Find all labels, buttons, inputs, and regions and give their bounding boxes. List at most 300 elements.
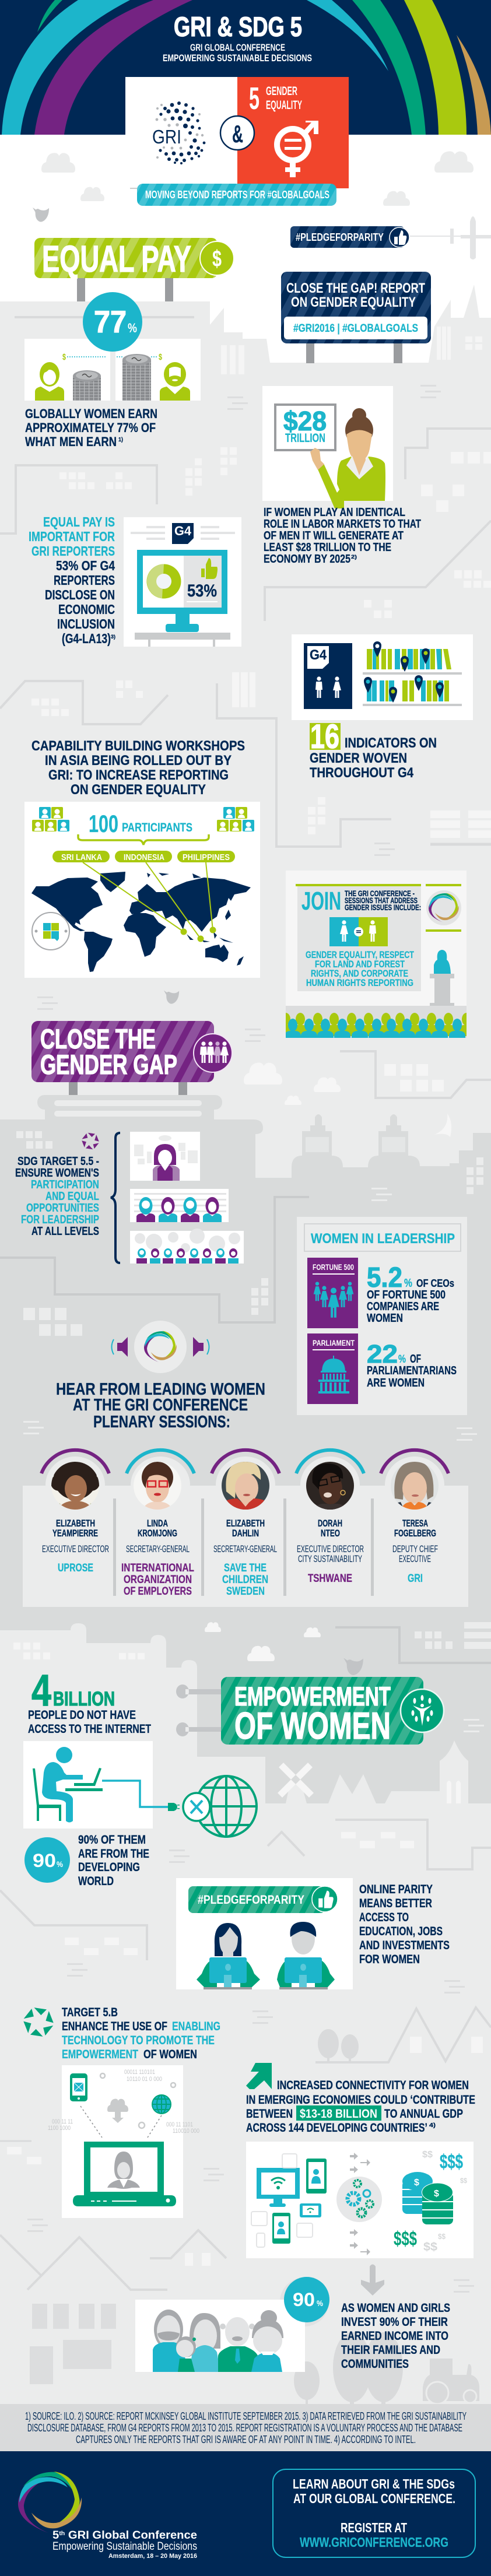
background street lines on dark layer [0, 1197, 491, 1663]
woman [190, 2313, 220, 2372]
text: equal pay for reporters [29, 514, 115, 646]
speaker organisations: ORGANIZATION [124, 1574, 192, 1586]
seated person [42, 1747, 83, 1823]
fortune 500 stat: COMPANIES ARE [367, 1300, 439, 1313]
speaker organisations: SWEDEN [226, 1585, 265, 1598]
background windows [7, 327, 491, 2266]
speaker organisations: CHILDREN [222, 1574, 268, 1586]
map pins [364, 641, 444, 703]
woman icon [35, 362, 64, 401]
text: if women play: ECONOMY BY 2025 [264, 553, 350, 566]
speaker roles: CITY SUSTAINABILITY [298, 1553, 362, 1564]
text: globally women earn: WHAT MEN EARN [25, 434, 117, 449]
sign: close the gap: #GRI2016 | #GLOBALGOALS [293, 322, 418, 335]
heading: capability building: GRI: TO INCREASE REPORTING [48, 767, 229, 783]
text: increased connectivity: ACROSS 144 DEVELOPING COUNTRIES’ [246, 2121, 427, 2135]
speaker organisations [58, 1562, 423, 1598]
dollar signs: $$ [438, 2232, 446, 2241]
text: equal pay for reporters: 53% OF G4 [56, 558, 115, 573]
building strip [15, 316, 194, 318]
text: online parity: FOR WOMEN [359, 1953, 420, 1966]
dollar signs: $$ [422, 2150, 433, 2160]
speaker names: ELIZABETH [226, 1518, 265, 1529]
binary digits: 110010 000 [173, 2128, 199, 2135]
equality tile [329, 917, 388, 946]
speaker organisations: SAVE THE [224, 1562, 266, 1574]
panel: pledge for parity [176, 1878, 353, 1989]
speaker names: YEAMPIERRE [52, 1528, 98, 1539]
stat: 4 billion: PEOPLE DO NOT HAVE [28, 1708, 136, 1722]
binary digits: 000 11 1101 [166, 2121, 193, 2128]
stat: 77 percent: 77 [94, 305, 127, 339]
parliament stat: ARE WOMEN [367, 1377, 425, 1389]
clouds [41, 151, 474, 206]
laptop [73, 2142, 176, 2206]
header band [0, 0, 491, 135]
conference logo [18, 2472, 197, 2560]
speaker organisations: TSHWANE [308, 1573, 352, 1585]
heading: hear from leading women: HEAR FROM LEADING WOMEN [56, 1380, 265, 1399]
JOIN text: THE GRI CONFERENCE - [345, 889, 415, 898]
session topics: FOR LAND AND FOREST [315, 959, 405, 970]
cloud icon [107, 2098, 128, 2123]
ribbon: moving beyond reports: MOVING BEYOND REPORTS FOR #GLOBALGOALS [145, 189, 329, 201]
session topics: RIGHTS, AND CORPORATE [311, 968, 408, 979]
text: 16 indicators: 16 [310, 718, 339, 756]
text: increased connectivity [246, 2063, 475, 2135]
sign board: $28 [283, 406, 327, 436]
text: SDG target 5.5: ENSURE WOMEN'S [15, 1167, 99, 1180]
brace [111, 1133, 120, 1263]
phone [70, 2073, 87, 2101]
stat: 4 billion: ACCESS TO THE INTERNET [28, 1722, 151, 1736]
text: 16 indicators: INDICATORS ON [345, 735, 437, 751]
fortune 500 stat: 5.2 [367, 1262, 402, 1293]
session topics: GENDER EQUALITY, RESPECT [306, 949, 414, 960]
text: 16 indicators: GENDER WOVEN [310, 750, 407, 766]
cable and plug [102, 1781, 180, 1811]
panel: $28 trillion [262, 386, 393, 508]
country pills: PHILIPPINES [183, 852, 230, 862]
text: 16 indicators [310, 718, 437, 781]
text: SDG target 5.5 [15, 1133, 100, 1238]
panel: world map [24, 802, 260, 978]
speaker names: TERESA [402, 1518, 428, 1529]
footnotes band [0, 2404, 491, 2451]
man at computer [277, 1922, 335, 1989]
stat: 90 percent developing world: 90% OF THEM [78, 1833, 146, 1847]
heading: capability building: IN ASIA BEING ROLLED OUT BY [45, 753, 232, 768]
parliament stat: PARLIAMENTARIANS [367, 1364, 457, 1377]
panel: women in leadership [297, 1217, 467, 1415]
heading: hear from leading women [56, 1380, 265, 1431]
ampersand badge [220, 116, 254, 150]
icon: conference speakers [112, 1321, 209, 1373]
child [176, 2336, 196, 2372]
pledge bar [188, 1886, 338, 1913]
parliament stat: % [398, 1353, 406, 1366]
conference logo: GRI Global Conference [65, 2529, 197, 2542]
coin stacks: $ [414, 2178, 419, 2188]
panel: leader group of eight [130, 1229, 244, 1264]
heading: hear from leading women: AT THE GRI CONFERENCE [73, 1396, 248, 1415]
call to action [273, 2469, 475, 2557]
world map shapes [31, 872, 251, 972]
panel: 16 indicators icons [292, 634, 473, 720]
JOIN text: GENDER ISSUES INCLUDE: [345, 903, 421, 912]
ampersand badge: & [232, 120, 243, 148]
airplane [410, 216, 491, 259]
badge: pledge for parity: #PLEDGEFORPARITY [296, 231, 384, 243]
speaker names: LINDA [147, 1518, 168, 1529]
session topics: HUMAN RIGHTS REPORTING [306, 977, 413, 988]
icon: disconnected globe [183, 1776, 257, 1837]
ribbon: moving beyond reports [130, 184, 336, 206]
panel: speakers [23, 1450, 468, 1607]
speaker 1 [41, 1450, 109, 1514]
text: equal pay for reporters: GRI REPORTERS [31, 543, 115, 559]
text: target 5.B: TARGET 5.B [62, 2006, 118, 2019]
53 percent: 53% [187, 581, 217, 601]
stat: 90 percent developing world [24, 1833, 149, 1888]
speaker names: ELIZABETH [56, 1518, 95, 1529]
connector lines [83, 862, 216, 941]
speaker roles [42, 1543, 438, 1564]
G4 tag [131, 523, 235, 544]
heading: capability building [31, 738, 245, 798]
text: if women play: ROLE IN LABOR MARKETS TO THAT [264, 518, 421, 531]
stat: 90 percent developing world: ARE FROM THE [78, 1847, 149, 1861]
binary digits: 1100 1000 [48, 2125, 71, 2132]
text: increased connectivity: TO ANNUAL GDP [384, 2107, 463, 2121]
sign: close the gender gap: GENDER GAP [40, 1049, 177, 1080]
text: online parity [359, 1883, 450, 1966]
G4 card: G4 [310, 647, 327, 663]
JOIN text [301, 887, 421, 915]
gender equality symbol [277, 121, 318, 177]
sign board [275, 405, 335, 450]
100 participants: PARTICIPANTS [122, 821, 192, 834]
binary digits: 000 11 11 [52, 2118, 73, 2125]
speaker roles: SECRETARY-GENERAL [126, 1543, 190, 1554]
bench slots [54, 1100, 202, 1117]
text: online parity: ONLINE PARITY [359, 1883, 433, 1896]
panel: logos [125, 77, 349, 188]
text: equal pay for reporters: (G4-LA13) [62, 631, 111, 646]
text: target 5.B [22, 2006, 220, 2061]
dashed connectors [80, 2106, 162, 2138]
text: globally women earn: GLOBALLY WOMEN EARN [25, 406, 157, 421]
rainbow arcs [2, 0, 491, 135]
text: increased connectivity: BETWEEN [246, 2107, 293, 2121]
speaker roles: EXECUTIVE DIRECTOR [42, 1543, 109, 1554]
sync icons [100, 2073, 176, 2128]
text: if women play [264, 506, 421, 566]
stat: 90 percent invested [284, 2277, 329, 2322]
dollar signs: $$$ [394, 2228, 417, 2250]
parliament stat [367, 1340, 457, 1389]
text: target 5.B: ENABLING [172, 2020, 220, 2033]
tower and windmill cut-outs [278, 1740, 468, 1803]
fortune 500 stat [367, 1262, 454, 1325]
birds [33, 208, 363, 1675]
sign: close the gap [281, 272, 431, 363]
fortune 500 stat: OF CEOs [416, 1278, 454, 1289]
sign: empowerment of women: EMPOWERMENT [234, 1682, 391, 1711]
puzzle badge [32, 913, 69, 950]
text: if women play: IF WOMEN PLAY AN IDENTICAL [264, 506, 405, 519]
text: as women and girls: INVEST 90% OF THEIR [341, 2315, 448, 2329]
fortune 500 card [307, 1258, 358, 1328]
sign: close the gap: ON GENDER EQUALITY [291, 294, 416, 310]
woman presenter [310, 408, 385, 508]
text: target 5.B: EMPOWERMENT [62, 2048, 138, 2061]
text: as women and girls: THEIR FAMILIES AND [341, 2343, 440, 2357]
badge: pledge for parity [290, 226, 409, 248]
stat: 90 percent developing world: DEVELOPING [78, 1861, 140, 1874]
fortune 500 card: FORTUNE 500 [313, 1262, 354, 1272]
panel: leader one [130, 1132, 200, 1181]
panel: G4 monitor [124, 517, 241, 647]
speaker names: KROMJONG [138, 1528, 177, 1539]
desk [135, 633, 230, 647]
background house blocks [30, 2304, 116, 2384]
small arrows [350, 2153, 370, 2255]
text: increased connectivity: $13-18 BILLION [300, 2107, 377, 2121]
panel: connectivity and GDP [246, 2142, 474, 2258]
text: as women and girls [341, 2301, 450, 2371]
GRI logo: GRI [152, 126, 181, 148]
man coin stack [122, 354, 151, 401]
fortune 500 stat: % [404, 1277, 412, 1290]
speaker roles: DEPUTY CHIEF [392, 1543, 438, 1554]
dotted lines: $ [62, 352, 66, 362]
background street lines [0, 429, 491, 2290]
sign: close the gender gap [31, 1021, 232, 1095]
sign: equal pay: EQUAL PAY [42, 238, 191, 280]
text: globally women earn [25, 406, 157, 449]
speaker names: NTEO [321, 1528, 340, 1539]
man icon [160, 362, 190, 401]
panel: pay comparison [24, 339, 201, 401]
clouds mid [205, 1062, 341, 1661]
country pills [52, 851, 235, 862]
speaker 2 [127, 1450, 194, 1514]
stat: 77 percent: % [128, 321, 137, 335]
coin stacks: $ [434, 2189, 439, 2199]
speed line motifs on dark layer [23, 1188, 484, 1732]
text: as women and girls: EARNED INCOME INTO [341, 2329, 448, 2343]
parliament stat: OF [410, 1353, 421, 1366]
text: equal pay for reporters: INCLUSION [57, 616, 115, 631]
conference logo: Empowering Sustainable Decisions [52, 2540, 197, 2553]
white dove on skyline [434, 1114, 451, 1137]
dotted lines [62, 352, 162, 362]
stat: 4 billion [28, 1666, 151, 1736]
text: globally women earn: APPROXIMATELY 77% OF [25, 420, 156, 435]
speaker names: FOGELBERG [394, 1528, 436, 1539]
G4 tag: G4 [174, 524, 192, 538]
subtitle: EMPOWERING SUSTAINABLE DECISIONS [163, 52, 312, 64]
speaker roles: SECRETARY-GENERAL [213, 1543, 277, 1554]
thumb icon [201, 558, 218, 579]
background windows on dark layer [16, 1131, 491, 1649]
chair, desk and laptop [33, 1768, 103, 1821]
text: as women and girls: AS WOMEN AND GIRLS [341, 2301, 450, 2315]
text: SDG target 5.5: SDG TARGET 5.5 - [17, 1155, 99, 1168]
panel title: WOMEN IN LEADERSHIP [311, 1231, 455, 1247]
speaker names: DORAH [318, 1518, 342, 1529]
panel: leader group of four [130, 1189, 229, 1222]
call to action: WWW.GRICONFERENCE.ORG [300, 2535, 448, 2550]
speaker organisations: OF EMPLOYERS [124, 1585, 192, 1598]
text: SDG target 5.5: AND EQUAL [45, 1190, 99, 1203]
text: equal pay for reporters: DISCLOSE ON [45, 587, 115, 602]
sign: empowerment of women [176, 1677, 444, 1747]
speaker 5 [381, 1450, 448, 1514]
stat: 90 percent developing world: WORLD [78, 1875, 114, 1888]
coin stacks [402, 2172, 453, 2224]
text: globally women earn: 1) [118, 437, 123, 443]
tower details [306, 1137, 405, 1152]
speaker roles: EXECUTIVE DIRECTOR [297, 1543, 364, 1554]
G4 card [304, 643, 352, 709]
brace [78, 834, 209, 845]
country pills: SRI LANKA [61, 852, 102, 862]
binary digits: 00011 110101 [124, 2069, 155, 2076]
dollar signs: $$$ [440, 2151, 463, 2173]
conference logo: Amsterdam, 18 – 20 May 2016 [108, 2553, 197, 2560]
dollar signs: $$ [460, 2177, 467, 2185]
100 participants: 100 [89, 810, 118, 837]
text: equal pay for reporters: EQUAL PAY IS [43, 514, 115, 529]
heading: capability building: ON GENDER EQUALITY [71, 782, 206, 798]
text: 16 indicators: THROUGHOUT G4 [310, 765, 414, 781]
text: SDG target 5.5: AT ALL LEVELS [31, 1225, 99, 1238]
session topics [306, 949, 414, 988]
sign: equal pay [34, 238, 234, 301]
SDG 5 label: EQUALITY [266, 99, 302, 112]
binary digits: 10110 01 0 000 [127, 2076, 162, 2083]
call to action: REGISTER AT [341, 2520, 407, 2535]
conference logo: 5 [52, 2529, 59, 2542]
panel title [304, 1224, 461, 1251]
heading: hear from leading women: PLENARY SESSIONS: [93, 1413, 230, 1431]
text: if women play: LEAST $28 TRILLION TO THE [264, 541, 391, 554]
speaker organisations: UPROSE [58, 1562, 93, 1574]
SDG 5 label: 5 [249, 81, 259, 116]
text: SDG target 5.5: FOR LEADERSHIP [21, 1213, 99, 1226]
subtitle: GRI GLOBAL CONFERENCE [190, 42, 285, 53]
stat: 77 percent [83, 292, 142, 352]
dollar signs: $$ [423, 2241, 437, 2254]
sign: close the gap: CLOSE THE GAP! REPORT [286, 280, 425, 296]
arrow: down to family [361, 2265, 384, 2296]
parliament card: PARLIAMENT [313, 1338, 355, 1347]
background trees and tractor [294, 2029, 479, 2404]
JOIN text: JOIN [301, 887, 341, 915]
stat: 4 billion: 4 [31, 1666, 51, 1715]
speaker organisations: INTERNATIONAL [121, 1562, 194, 1574]
text: equal pay for reporters: IMPORTANT FOR [29, 529, 115, 544]
text: online parity: MEANS BETTER [359, 1897, 432, 1910]
text: SDG target 5.5: PARTICIPATION [31, 1178, 99, 1191]
text: equal pay for reporters: REPORTERS [54, 573, 115, 588]
text: as women and girls: COMMUNITIES [341, 2357, 409, 2371]
grandmother [251, 2310, 283, 2372]
monitor with wifi [257, 2168, 300, 2207]
book shelves [363, 649, 462, 706]
100 participants [89, 810, 192, 837]
audience [286, 1006, 467, 1038]
conference logo [426, 890, 461, 925]
text: equal pay for reporters: ECONOMIC [58, 602, 115, 617]
heading: capability building: CAPABILITY BUILDING WORKSHOPS [31, 738, 245, 754]
text: target 5.B: ENHANCE THE USE OF [62, 2020, 167, 2033]
sign: close the gender gap: CLOSE THE [40, 1023, 156, 1054]
man [153, 2310, 187, 2372]
text: equal pay for reporters: 3) [111, 634, 115, 640]
footer [0, 2451, 491, 2576]
text: target 5.B: TECHNOLOGY TO PROMOTE THE [62, 2034, 215, 2047]
globe [152, 2095, 171, 2114]
speaker names [52, 1518, 436, 1539]
country pills: INDONESIA [124, 852, 164, 862]
binary digits [48, 2069, 199, 2135]
panel: person at laptop [23, 1741, 180, 1829]
JOIN text: SESSIONS THAT ADDRESS [345, 896, 418, 905]
SDG 5 label: GENDER [266, 85, 297, 98]
woman coin stack [73, 370, 101, 401]
dotted lines: $ [159, 352, 162, 362]
speaker organisations: GRI [408, 1573, 423, 1585]
speaker 4 [296, 1450, 364, 1514]
sign: equal pay: $ [212, 246, 222, 272]
conference logo: th [59, 2531, 65, 2537]
sign board: TRILLION [285, 431, 325, 445]
fortune 500 stat: WOMEN [367, 1312, 403, 1325]
subtitle [163, 42, 312, 64]
sign: empowerment of women: OF WOMEN [234, 1704, 391, 1747]
text: if women play: 2) [351, 554, 357, 560]
speed line motifs [27, 385, 474, 2293]
pledge bar: #PLEDGEFORPARITY [198, 1893, 304, 1907]
text: online parity: ACCESS TO [359, 1911, 409, 1924]
parliament card [307, 1333, 358, 1404]
text: if women play: OF MEN IT WILL GENERATE AT [264, 529, 404, 542]
panel: family [135, 2277, 329, 2372]
donut chart [147, 564, 181, 598]
panel: join the conference [286, 871, 467, 1038]
parliament stat: 22 [367, 1340, 398, 1368]
speaker 3 [212, 1450, 279, 1514]
stat: 90 percent developing world: 90 [33, 1850, 56, 1871]
stat: 90 percent invested: 90 [293, 2289, 315, 2310]
dark city skyline background [0, 1095, 491, 1803]
title: GRI & SDG 5 [174, 11, 302, 42]
gears [336, 2177, 382, 2222]
text: increased connectivity: 4) [429, 2122, 436, 2129]
participant tiles [32, 807, 254, 831]
text: online parity: AND INVESTMENTS [359, 1939, 450, 1952]
dollar signs [394, 2150, 467, 2254]
stat: 90 percent developing world: % [57, 1859, 63, 1869]
text: target 5.B: OF WOMEN [143, 2048, 197, 2061]
monitor [137, 550, 227, 632]
GRI logo [152, 101, 205, 164]
panel: enabling technology [48, 2065, 199, 2218]
fortune 500 stat: OF FORTUNE 500 [367, 1289, 446, 1301]
